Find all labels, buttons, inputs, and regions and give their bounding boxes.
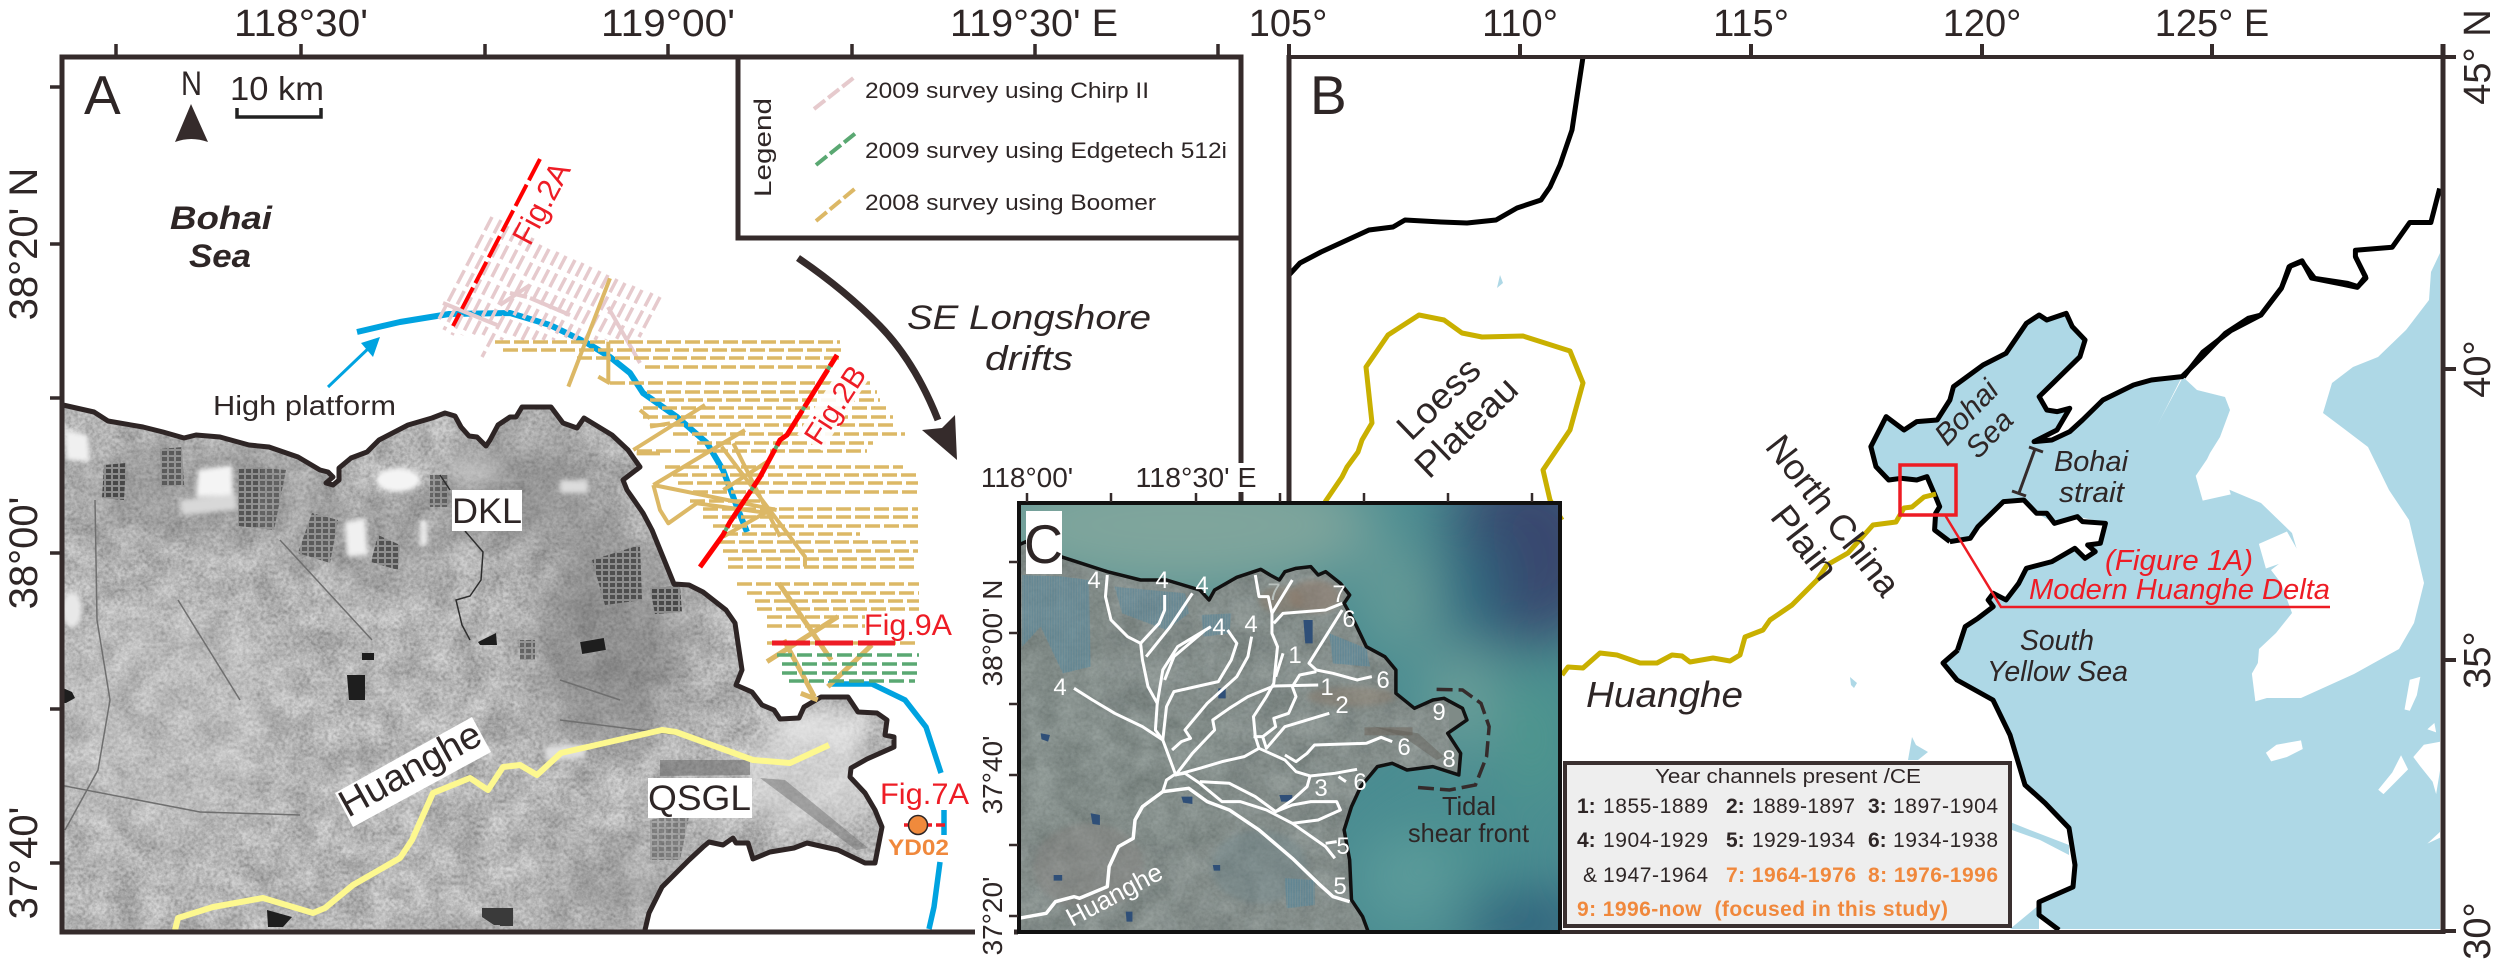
profile Fig.2A line	[453, 159, 540, 326]
label: Tidal shear front: shear front	[1408, 818, 1530, 848]
label: Loess Plateau: Loess	[1388, 349, 1488, 448]
Huanghe and Loess boundary	[1325, 315, 1583, 520]
legend item: Boomer	[816, 187, 1156, 221]
high platform line (blue)	[357, 313, 747, 532]
axis labels: panel A latitude: 38°00'	[2, 497, 46, 609]
label: Modern Huanghe Delta: Modern Huanghe Delta	[2029, 574, 2330, 606]
row 2: 6:	[1868, 829, 1887, 852]
label: South Yellow Sea: Yellow Sea	[1987, 656, 2128, 688]
channel number labels: 6	[1397, 734, 1411, 761]
axis labels: panel B latitude: 40°	[2457, 340, 2499, 398]
label: Loess Plateau: Plateau	[1406, 368, 1526, 486]
row 2	[1577, 829, 1998, 852]
north arrow	[175, 65, 208, 142]
white margin behind inset labels	[975, 463, 1560, 969]
survey cross lines: pink	[443, 285, 640, 363]
legend item: Edgetech	[816, 132, 1227, 165]
channel number labels: 4	[1155, 567, 1169, 594]
fish ponds	[102, 447, 868, 860]
row 2: 1929-1934	[1752, 829, 1855, 852]
land: grayscale satellite	[63, 405, 894, 930]
legend item: Boomer: 2008 survey using Boomer	[865, 190, 1156, 215]
row 3: 7: 1964-1976	[1726, 864, 1856, 887]
label: Bohai Sea: Sea	[1959, 404, 2020, 465]
axis labels: panel B latitude: 45° N	[2457, 9, 2499, 105]
profile Fig.9A line	[772, 640, 895, 646]
label: SE Longshore drifts: drifts	[985, 340, 1073, 378]
north arrow: N	[181, 65, 202, 103]
axis labels: panel C longitude	[981, 462, 1256, 493]
boundary line: north	[1289, 57, 1583, 275]
label: SE Longshore drifts	[907, 299, 1151, 378]
core YD02 marker	[908, 816, 928, 834]
coastline: northeast	[2183, 188, 2440, 377]
channel number labels: 8	[1442, 746, 1456, 773]
panel A: delta satellite map	[2, 3, 1241, 932]
axis labels: panel B longitude: 125° E	[2155, 3, 2269, 45]
label: Bohai Sea bold: Bohai	[170, 200, 273, 236]
channel number labels: 5	[1333, 873, 1347, 900]
axis labels: panel B longitude: 105°	[1249, 3, 1327, 45]
label: Huanghe: Huanghe	[1586, 674, 1743, 715]
row 3	[1583, 864, 1998, 887]
axis labels: panel C longitude: 118°00'	[981, 462, 1073, 493]
row 3: 8: 1976-1996	[1868, 864, 1998, 887]
axis labels: panel A longitude: 119°30' E	[950, 3, 1118, 45]
label: Figure 1A: (Figure 1A)	[2105, 545, 2253, 577]
channel number labels: 4	[1195, 572, 1209, 599]
sea: Yellow Sea	[1943, 253, 2440, 929]
row 1: 1889-1897	[1752, 795, 1855, 818]
profile Fig.2B line	[700, 355, 837, 567]
scale bar: 10 km	[230, 70, 324, 107]
Bohai strait bar	[2012, 447, 2043, 496]
arrow: to high platform	[328, 337, 380, 387]
axis labels: panel A longitude	[234, 3, 1118, 45]
channel number labels: 6	[1342, 606, 1356, 633]
legend title: Legend	[750, 98, 777, 197]
row 1: 2:	[1726, 795, 1745, 818]
inset channels	[1018, 575, 1392, 918]
inset coastline	[1018, 542, 1467, 932]
blue front near delta	[828, 684, 944, 929]
roads and canals	[60, 500, 680, 830]
DKL river trace	[440, 475, 483, 640]
channel number labels: 9	[1432, 699, 1446, 726]
coastline: south Yellow Sea	[1943, 650, 2075, 930]
channel number labels: 1	[1320, 674, 1334, 701]
label: Fig.2B: Fig.2B	[798, 360, 873, 451]
row 2: 4:	[1577, 829, 1596, 852]
frame: panel C	[1009, 493, 1560, 932]
axis labels: panel B latitude: 35°	[2457, 631, 2499, 689]
white panel background	[62, 57, 1241, 932]
channel number labels: 6	[1376, 667, 1390, 694]
channel number labels: 5	[1336, 833, 1350, 860]
label: Fig.2A: Fig.2A	[505, 156, 578, 250]
label: Fig.9A: Fig.9A	[864, 609, 952, 642]
axis labels: panel C latitude	[977, 580, 1008, 955]
survey lines: Boomer (tan)	[495, 342, 919, 643]
axis labels: panel C latitude: 37°20'	[977, 877, 1008, 955]
arrow: SE longshore drift	[798, 258, 957, 460]
channel number labels: 4	[1053, 674, 1067, 701]
row 2: 5:	[1726, 829, 1745, 852]
label: QSGL: QSGL	[648, 779, 751, 818]
channel number labels: 4	[1087, 567, 1101, 594]
panel letter A: A	[84, 64, 121, 126]
row 1: 1:	[1577, 795, 1596, 818]
label: Huanghe white: Huanghe	[1061, 857, 1168, 932]
survey cross lines: tan	[633, 405, 805, 567]
label: Bohai strait	[2054, 446, 2130, 509]
axis labels: panel B longitude	[1249, 3, 2269, 45]
axis labels: panel B longitude: 120°	[1943, 3, 2021, 45]
label: High platform: High platform	[213, 390, 396, 421]
delta locator box	[1900, 465, 1956, 515]
row 1: 1897-1904	[1893, 795, 1998, 818]
panel letter C: C	[1024, 513, 1063, 575]
legend box	[738, 57, 1241, 238]
channel number labels: 7	[1332, 581, 1346, 608]
axis labels: panel B latitude: 30°	[2457, 902, 2499, 960]
channel number labels: 7	[1267, 579, 1281, 606]
axis labels: panel C latitude: 38°00' N	[977, 580, 1008, 686]
table title: Year channels present /CE	[1655, 766, 1921, 788]
label: Fig.7A: Fig.7A	[880, 778, 969, 811]
label: SE Longshore drifts: SE Longshore	[907, 299, 1151, 337]
label: Bohai Sea bold	[170, 200, 273, 274]
label: Tidal shear front	[1408, 791, 1530, 848]
legend item: Chirp II	[814, 76, 1149, 109]
inset land	[1018, 542, 1467, 932]
locator leader line	[1945, 515, 2330, 607]
label: North China Plain: North China	[1758, 427, 1909, 605]
label: South Yellow Sea	[1987, 625, 2128, 688]
table box	[1565, 763, 2010, 926]
label: YD02: YD02	[888, 835, 949, 860]
channel number labels	[1053, 567, 1456, 900]
row 3: 1947-1964	[1603, 864, 1708, 887]
label: Bohai Sea: Bohai	[1928, 373, 2006, 452]
tidal shear front dashed arc	[1416, 689, 1489, 790]
survey lines: Edgetech (green)	[777, 655, 919, 681]
inset sea gradient	[1021, 505, 1558, 930]
axis labels: panel B latitude	[2457, 9, 2499, 960]
inset land colour patches	[1019, 540, 1449, 935]
label: North China Plain: Plain	[1763, 497, 1847, 588]
axis labels: panel B longitude: 115°	[1713, 3, 1789, 45]
channel number labels: 4	[1212, 614, 1226, 641]
Huanghe course in panel B	[1562, 494, 1936, 675]
row 4: 9: 1996-now (focused in this study)	[1577, 898, 1948, 921]
channel year table	[1565, 763, 2010, 926]
row 1	[1577, 795, 1998, 818]
row 3: &	[1583, 864, 1597, 887]
coastline: Bohai and Liaoning	[1871, 257, 2366, 542]
axis labels: panel C longitude: 118°30' E	[1136, 462, 1256, 493]
label: South Yellow Sea: South	[2020, 625, 2094, 657]
axis labels: panel A longitude: 118°30'	[234, 3, 368, 45]
label: Huanghe on white: Huanghe	[332, 714, 489, 826]
panel B: regional map	[1249, 3, 2499, 960]
row 2: 1934-1938	[1893, 829, 1998, 852]
axis labels: panel B longitude: 110°	[1482, 3, 1558, 45]
row 1: 3:	[1868, 795, 1887, 818]
panel C: channel history inset	[982, 468, 1562, 954]
channel number labels: 3	[1314, 775, 1328, 802]
bottom frame line between C and B	[1560, 930, 2443, 934]
coastline: Shandong peninsula	[1950, 500, 2105, 650]
coastline: panel A	[63, 405, 894, 930]
channel number labels: 2	[1335, 692, 1349, 719]
satellite texture and patches	[50, 400, 902, 932]
frame: panel B	[1289, 44, 2456, 934]
row 2: 1904-1929	[1603, 829, 1708, 852]
axis labels: panel A longitude: 119°00'	[601, 3, 735, 45]
sea: Bohai Sea	[1871, 313, 2182, 542]
channel number labels: 4	[1244, 611, 1258, 638]
axis labels: panel A latitude: 38°20' N	[2, 168, 46, 320]
row 1: 1855-1889	[1603, 795, 1708, 818]
profile Fig.7A line	[904, 823, 945, 827]
label: Bohai strait: strait	[2059, 477, 2126, 509]
label: Tidal shear front: Tidal	[1442, 791, 1496, 821]
channel number labels: 6	[1353, 769, 1367, 796]
axis labels: panel A latitude: 37°40'	[2, 807, 46, 919]
axis labels: panel A latitude	[2, 168, 46, 919]
frame: panel A	[50, 44, 1241, 932]
label: DKL: DKL	[452, 492, 522, 531]
Huanghe channel (yellow)	[175, 730, 829, 930]
islands and lakes	[1497, 275, 2441, 929]
legend item: Edgetech: 2009 survey using Edgetech 512i	[865, 138, 1227, 163]
label: Bohai Sea bold: Sea	[189, 238, 251, 274]
label: Bohai strait: Bohai	[2054, 446, 2130, 478]
panel letter B: B	[1310, 64, 1347, 126]
axis labels: panel C latitude: 37°40'	[977, 736, 1008, 814]
legend item: Chirp II: 2009 survey using Chirp II	[865, 78, 1149, 103]
survey lines: Chirp II (pink)	[437, 217, 660, 357]
channel number labels: 1	[1288, 642, 1302, 669]
